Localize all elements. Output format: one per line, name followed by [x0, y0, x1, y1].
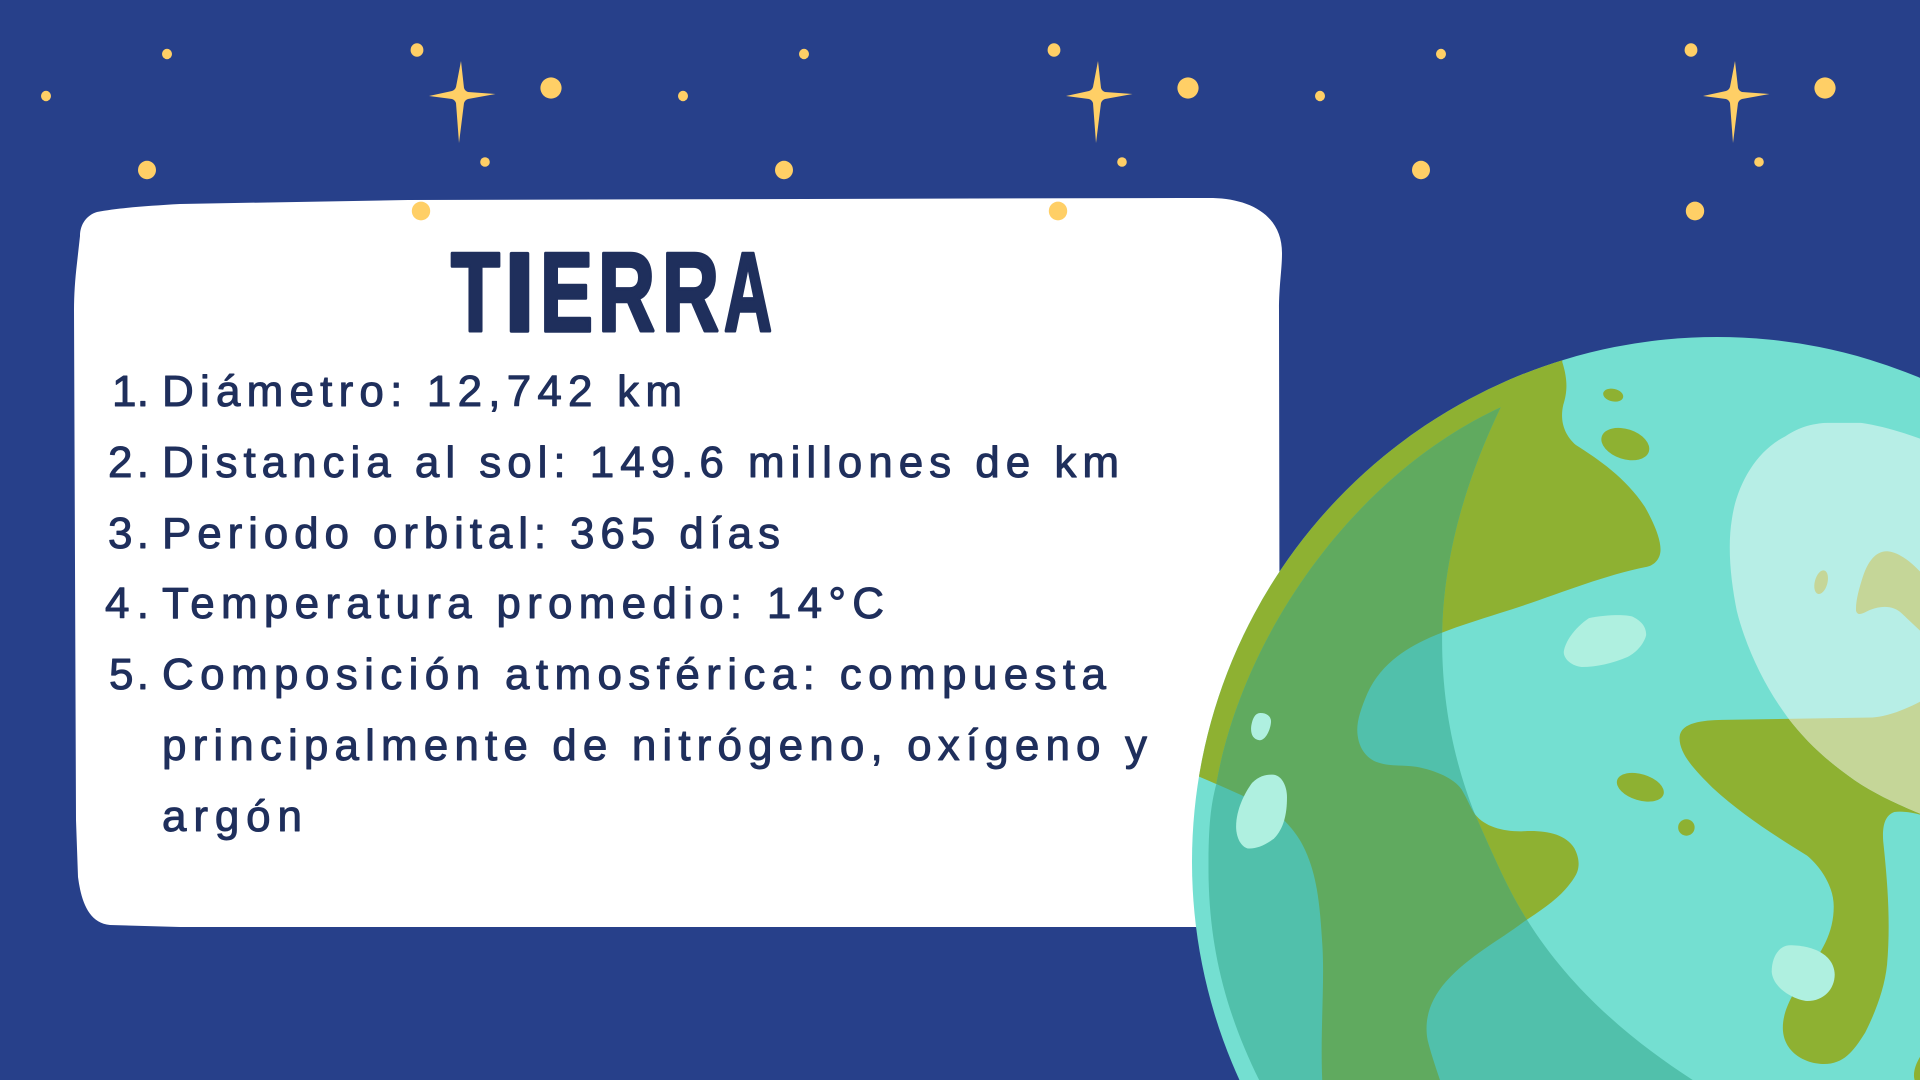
title: I [504, 230, 535, 355]
title: R [662, 230, 719, 355]
stars and dots: left group [41, 43, 562, 220]
stars and dots: centre group [678, 43, 1199, 220]
item 2: 2. [108, 438, 149, 487]
title: E [540, 230, 593, 355]
item 4: 4. [105, 579, 149, 628]
title: A [724, 230, 772, 355]
polar highlight [1730, 422, 1920, 814]
item 5: argón [162, 792, 302, 841]
item 1: 1. [112, 367, 149, 416]
stars and dots: right group [1315, 43, 1836, 220]
item 5: 5. [109, 650, 149, 699]
title: T [451, 230, 500, 355]
illustration: planet Earth [1160, 320, 1920, 1080]
numbered list [105, 367, 1147, 841]
item 5: principalmente de nitrógeno, oxígeno y [162, 721, 1147, 770]
item 3: 3. [108, 509, 149, 558]
item 4: Temperatura promedio: 14°C [162, 579, 884, 628]
ocean [1160, 320, 1920, 1080]
icon: four-point star [429, 61, 496, 143]
clouds [1236, 615, 1835, 1001]
shaded side of the globe [1208, 407, 1692, 1080]
panel: white info card [74, 198, 1282, 927]
item 3: Periodo orbital: 365 días [162, 509, 780, 558]
item 5 [109, 650, 1147, 841]
title [451, 230, 772, 355]
item 2: Distancia al sol: 149.6 millones de km [162, 438, 1119, 487]
continents [1170, 330, 1920, 1080]
item 5: Composición atmosférica: compuesta [162, 650, 1107, 699]
title: R [598, 230, 655, 355]
icon: four-point star [1066, 61, 1132, 143]
item 1: Diámetro: 12,742 km [162, 367, 682, 416]
icon: four-point star [1703, 61, 1770, 143]
